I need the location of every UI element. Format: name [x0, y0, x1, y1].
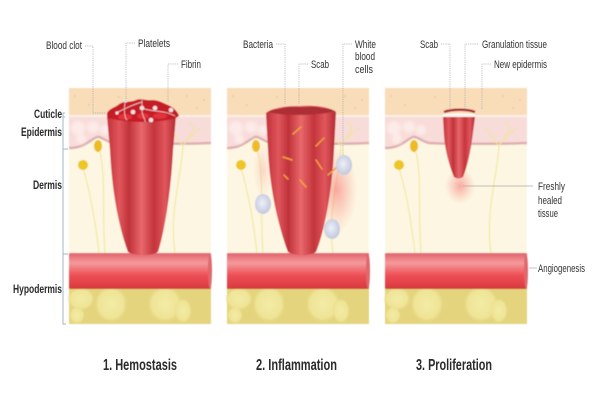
clot top [107, 99, 179, 122]
label: White blood cells: blood [355, 51, 375, 63]
scab top [268, 107, 335, 115]
label: Fibrin [168, 59, 201, 102]
label: New epidermis [482, 59, 547, 110]
platelets [115, 100, 173, 122]
label: Platelets: Platelets [138, 38, 170, 50]
panel 2: inflammation [225, 88, 370, 325]
label: Blood clot: Blood clot [46, 40, 82, 52]
title: 1. Hemostasis: 1. Hemostasis [103, 357, 177, 374]
label: Platelets [126, 38, 170, 102]
label: Fibrin: Fibrin [181, 59, 201, 71]
label: Freshly healed tissue [463, 181, 565, 220]
label: White blood cells [343, 39, 376, 155]
label: Bacteria: Bacteria [243, 39, 274, 51]
layer label: Epidermis: Epidermis [21, 127, 62, 139]
panel 1: hemostasis [67, 88, 212, 325]
label: Scab: Scab [420, 39, 438, 51]
title: 2. Inflammation: 2. Inflammation [256, 357, 337, 374]
layer label: Hypodermis: Hypodermis [13, 284, 62, 296]
inflammation glow [317, 148, 357, 232]
panel 3: proliferation [383, 88, 528, 325]
scab column [266, 106, 336, 255]
label: Scab [299, 59, 329, 104]
label: Freshly healed tissue: Freshly [538, 181, 565, 193]
layer label: Cuticle: Cuticle [34, 109, 62, 121]
healed tissue glow [445, 168, 475, 204]
left layer brackets [63, 113, 68, 324]
new column [443, 117, 475, 178]
label: Bacteria [243, 39, 285, 104]
label: Scab: Scab [311, 59, 329, 71]
label: Granulation tissue: Granulation tissue [482, 39, 547, 51]
label: Blood clot [46, 40, 105, 113]
label: Freshly healed tissue: healed [538, 195, 562, 207]
label: New epidermis: New epidermis [494, 59, 547, 71]
scab strip [444, 110, 475, 112]
label: Granulation tissue [465, 39, 547, 110]
white blood cells [255, 155, 352, 239]
label: White blood cells: cells [355, 64, 373, 76]
label: White blood cells: White [355, 39, 376, 51]
layer label: Dermis: Dermis [33, 180, 62, 192]
label: Freshly healed tissue: tissue [538, 208, 558, 220]
title: 3. Proliferation: 3. Proliferation [416, 357, 492, 374]
bacteria [283, 127, 336, 187]
blood clot column [107, 116, 176, 255]
white line [443, 113, 475, 116]
fibrin strands [118, 100, 175, 122]
label: Scab [420, 39, 450, 110]
label: Angiogenesis [529, 263, 585, 275]
